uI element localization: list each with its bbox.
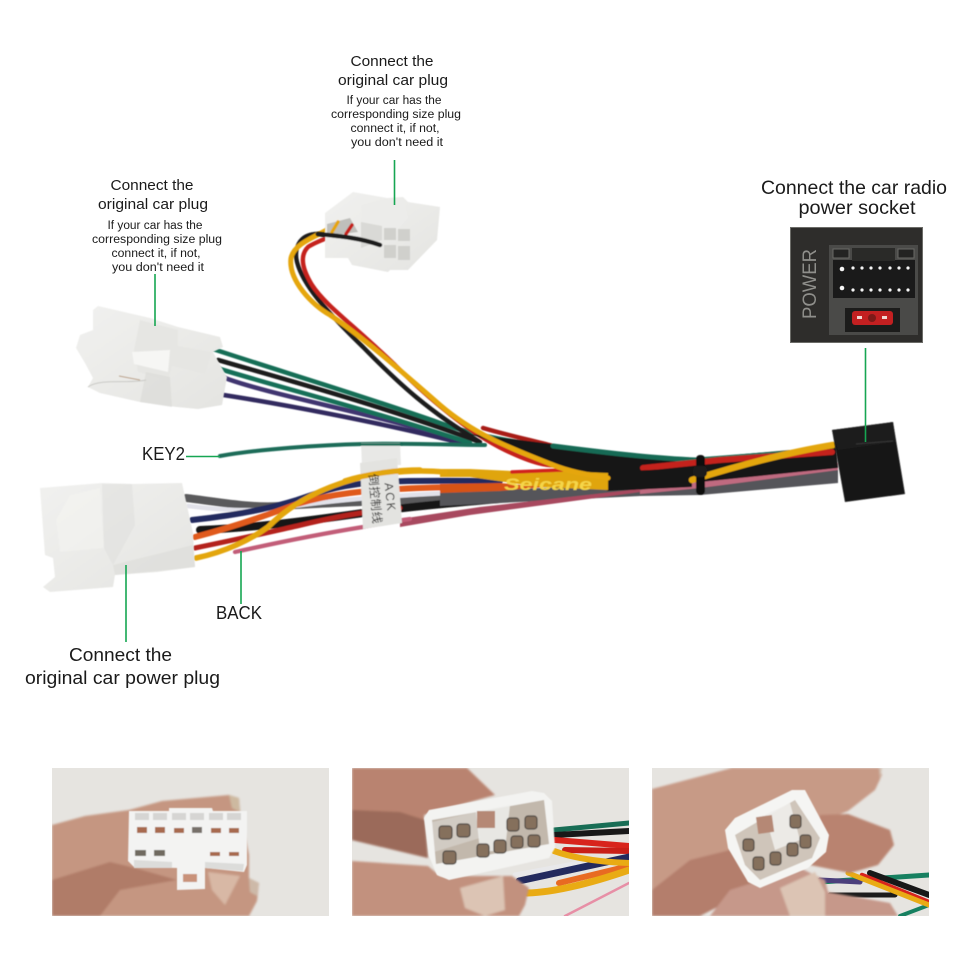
wires from top connector	[296, 225, 562, 466]
fuse	[852, 311, 893, 325]
label: top connector: connect it, if not,	[350, 123, 440, 135]
POWER label on socket: POWER	[800, 249, 821, 319]
label: original car power plug	[25, 644, 220, 688]
label: left connector: If your car has the	[108, 220, 202, 232]
wrapped bundle centre and shrink tube	[440, 464, 838, 506]
label: car radio power socket: Connect the car radio	[761, 177, 947, 199]
wiring harness photo illustration	[186, 222, 838, 558]
label: top connector: If your car has the	[346, 95, 442, 107]
label: car radio power socket: power socket	[798, 197, 916, 219]
label: left connector: connect it, if not,	[112, 248, 200, 260]
label tags on wires	[345, 443, 420, 529]
label: left connector: you don't need it	[112, 262, 205, 274]
plug shell	[725, 790, 829, 888]
wires from top-left connector	[207, 349, 560, 448]
white plug front	[128, 808, 247, 890]
connector: bottom-left white power plug	[40, 483, 195, 592]
KEY2 wire	[220, 444, 485, 456]
label: top connector: original car plug	[338, 73, 448, 89]
label: original car power plug: original car power plug	[25, 667, 220, 688]
label: original car power plug: Connect the	[69, 644, 172, 665]
socket frame	[829, 245, 918, 335]
label: top connector	[331, 54, 461, 149]
fingers	[352, 768, 496, 821]
label: top connector: you don't need it	[351, 137, 444, 149]
label: top connector: Connect the	[350, 54, 434, 70]
hand	[652, 768, 883, 890]
wires	[515, 823, 629, 893]
connector: black radio plug	[832, 422, 905, 502]
label: BACK: BACK	[216, 603, 262, 623]
label: top connector: corresponding size plug	[331, 109, 461, 121]
connector: top white plug	[318, 192, 440, 272]
label: left connector: corresponding size plug	[92, 234, 222, 246]
cable tie	[693, 455, 707, 495]
label: left connector	[92, 178, 222, 274]
power socket photo	[790, 227, 923, 343]
wire bundle from bottom-left power connector	[186, 481, 510, 548]
wires	[820, 873, 929, 916]
brass terminals	[439, 816, 540, 864]
thin pink wire	[565, 883, 629, 916]
yellow wires on top	[291, 222, 608, 478]
label tags on wires: ACK	[382, 482, 398, 511]
brass terminals	[743, 815, 811, 870]
socket pins	[840, 266, 910, 292]
label: KEY2: KEY2	[142, 444, 185, 464]
brand print on wires: Seicane	[504, 475, 592, 494]
label: car radio power socket	[761, 177, 947, 219]
plug shell	[424, 791, 555, 880]
photo: eight-pin plug rear view	[652, 768, 929, 916]
label: left connector: Connect the	[110, 178, 194, 194]
label: left connector: original car plug	[98, 197, 208, 213]
label tags on wires: 倒控制线	[366, 473, 384, 524]
photo: twelve-pin plug rear view	[352, 768, 629, 916]
photo: large plug held in fingers	[52, 768, 329, 916]
plug openings	[135, 813, 241, 820]
callout lines	[126, 160, 866, 642]
hand	[52, 795, 259, 916]
connector: top-left white plug	[76, 306, 227, 409]
